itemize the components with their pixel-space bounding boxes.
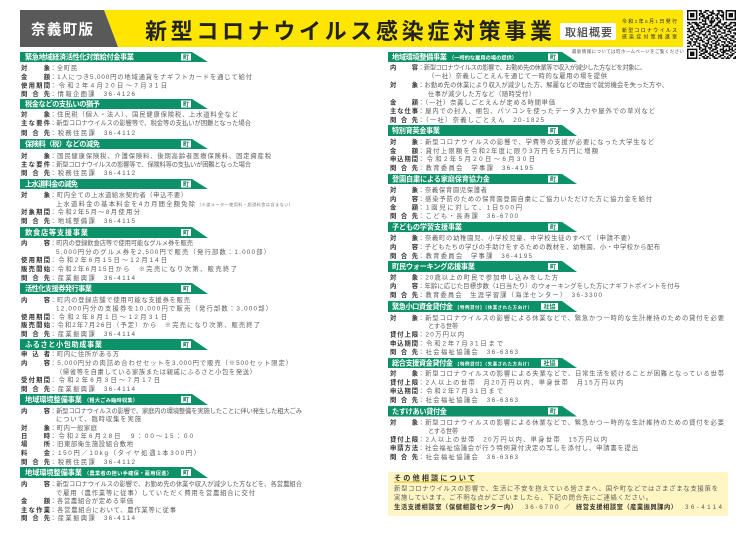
- details: ：令和2年6月15日から ※完売になり次第、販売終了: [50, 264, 237, 273]
- details: [21, 190, 293, 225]
- heading: 地域環境整備事業: [25, 468, 82, 477]
- details: ：（一社）奈義しごとえんが定める時間単価: [418, 98, 555, 106]
- details: 問合先: [390, 395, 419, 404]
- details: 問合先: [21, 513, 51, 522]
- summary label: 取組概要: [565, 25, 612, 39]
- details: ：新型コロナウイルスの影響で、お勤め先の休業や収入が減少した方などを、各営農組合: [50, 479, 303, 488]
- heading: 町: [183, 101, 189, 108]
- details: ：令和2年7月31日まで: [418, 338, 503, 348]
- details: ：町内に住所がある方: [50, 349, 119, 358]
- details: 金 額: [21, 496, 51, 505]
- details: ：住民税（個人・法人）、国民健康保険税、上水道料金など: [50, 110, 239, 119]
- details: （一社）奈義しごとえんを通じて一時的な雇用の場を提供: [428, 71, 608, 80]
- heading: 町: [550, 128, 556, 135]
- details: [21, 238, 270, 282]
- details: （帰省等を自粛している家族または親戚にふるさと小包を発送）: [56, 367, 256, 376]
- details: 問合先: [390, 347, 419, 356]
- details: [390, 368, 724, 404]
- heading: 子どもの学習支援事業: [392, 223, 462, 232]
- panel: 活性化支援券発行事業: [20, 283, 272, 338]
- callout contacts: [394, 502, 722, 511]
- details: 対 象: [21, 110, 51, 119]
- details: 対 象: [390, 80, 419, 89]
- details: 対象期間: [21, 207, 50, 216]
- details: 使用期間: [21, 81, 50, 90]
- details: ：社会福祉協議会 36-6363: [418, 395, 518, 404]
- details: 仕事が減少した方など（随時受付）: [428, 89, 535, 98]
- details: ：令和2年6月15日～12月14日: [50, 255, 167, 264]
- details: [390, 313, 725, 356]
- details: 内 容: [390, 194, 419, 203]
- heading: 町民ウォーキング応援事業: [392, 262, 475, 271]
- details: 対 象: [21, 423, 51, 432]
- details: 問合先: [390, 115, 419, 124]
- details: [390, 137, 655, 172]
- panel: 総合支援資金貸付金: [388, 358, 724, 404]
- details: ：情報企画課 36-4126: [50, 89, 135, 98]
- details: ：お勤め先の休業により収入が減少した方、解雇などの理由で就労機会を失った方や、: [418, 80, 668, 89]
- details: ：町内全ての上水道給水契約者（申込不要）: [50, 190, 187, 199]
- heading: 町: [183, 397, 189, 404]
- details: 内 容: [21, 358, 51, 367]
- icon: QR code: [687, 10, 736, 59]
- details: とする世帯: [428, 426, 458, 435]
- details: 金 額: [390, 202, 419, 212]
- region badge: [20, 10, 118, 47]
- heading: 町: [183, 141, 189, 148]
- details: 場 所: [21, 439, 51, 448]
- details: ：貸付上限額を令和2年度に限り3万円を5万円に増額: [418, 146, 599, 155]
- heading: [20, 227, 208, 238]
- panel: 飲食店等支援事業: [20, 227, 270, 282]
- details: ：令和2年6月3日～7月17日: [50, 375, 160, 384]
- details: ：地域整備課 36-4115: [50, 216, 135, 225]
- details: [21, 295, 272, 338]
- details: ：教育委員会 学事課 36-4195: [418, 251, 532, 260]
- heading: [388, 358, 577, 368]
- heading: [20, 179, 208, 189]
- callout contacts: 経営支援相談室（産業振興課内）: [576, 502, 677, 511]
- details: ：旧東部衛生施設組合敷地: [50, 439, 134, 448]
- heading: 町: [183, 54, 189, 61]
- panel: 緊急地域経済活性化対策給付金事業: [20, 52, 252, 98]
- details: 貸付上限: [390, 378, 419, 386]
- details: 対 象: [21, 190, 51, 199]
- heading: 【特例貸付】（失業された方向け）: [455, 361, 532, 368]
- panel: 地域環境整備事業（農業者の担い手確保・雇用促進）: [20, 467, 303, 522]
- details: ：令和2年4月20日～7月31日: [50, 81, 167, 90]
- details: 問合先: [21, 273, 51, 282]
- details: 申込期間: [390, 338, 418, 348]
- details: 内 容: [21, 238, 51, 247]
- details: ：全町民: [50, 63, 78, 72]
- details: 問合先: [390, 290, 419, 299]
- heading: 緊急小口資金貸付金: [392, 302, 454, 311]
- panel: 登園自粛による家庭保育協力金: [388, 174, 652, 220]
- panel: たすけあい貸付金: [388, 406, 725, 461]
- heading: （粗大ごみ臨時収集）: [84, 396, 138, 404]
- heading: 【特例貸付】（休業された方向け）: [455, 304, 532, 311]
- details: ：令和2年6月28日 9：00～15：00: [50, 431, 193, 440]
- heading: たすけあい貸付金: [392, 407, 448, 416]
- details: 問合先: [390, 163, 419, 172]
- details: 主な仕事: [390, 106, 419, 115]
- details: ：税務住民課 36-4112: [50, 128, 135, 137]
- details: 使用期間: [21, 312, 50, 321]
- details: [21, 151, 272, 177]
- details: ：5,000円分の肉詰め合わせセットを3,000円で販売（※500セット限定）: [50, 358, 292, 367]
- details: 金 額: [390, 146, 419, 155]
- heading: [388, 301, 577, 312]
- heading: 町: [550, 224, 556, 231]
- heading: 町: [183, 286, 189, 293]
- details: ：子どもたちの学びの手助けをするための教材を、幼稚園、小・中学校から配布: [418, 242, 660, 251]
- details: ：国民健康保険税、介護保険料、後期高齢者医療保険料、固定資産税: [50, 151, 272, 160]
- details: 対 象: [390, 368, 419, 378]
- details: 内 容: [21, 479, 51, 488]
- details: ：奈義町の幼稚園児、小学校児童、中学校生徒のすべて（申請不要）: [418, 233, 634, 242]
- details: （※渡メーター使用料・超過料金は含まない）: [197, 201, 293, 208]
- heading: 町: [183, 470, 189, 477]
- details: 対 象: [390, 185, 419, 194]
- details: ：令和2年5月20日～6月30日: [418, 154, 535, 163]
- heading: 町: [183, 230, 189, 237]
- heading: 特別育英金事業: [392, 126, 440, 135]
- details: ：町内の登録店舗で使用可能な支援券を販売: [50, 295, 190, 304]
- details: ：税務住民課 36-4112: [50, 168, 135, 177]
- heading: 町: [550, 54, 556, 61]
- heading: [20, 283, 208, 294]
- callout contacts: 36-4114: [685, 504, 722, 511]
- details: 料 金: [21, 448, 51, 457]
- details: 対 象: [390, 137, 419, 146]
- panel: 町民ウォーキング応援事業: [388, 261, 680, 299]
- heading: [388, 222, 577, 232]
- details: 問合先: [21, 457, 51, 466]
- details: ：各営農組合が定める単価: [50, 496, 133, 505]
- details: 5,000円分のグルメ券を2,500円で販売（発行部数：1,000部）: [56, 247, 270, 256]
- details: ：新型コロナウイルスの影響で、学費等の支援が必要になった大学生など: [418, 137, 655, 146]
- details: 貸付上限: [390, 434, 419, 444]
- heading: [388, 174, 577, 184]
- details: ：1人につき5,000円の地域通貨をナギフトカードを通じて給付: [50, 72, 252, 81]
- details: 貸付上限: [390, 330, 419, 338]
- heading: [388, 406, 577, 416]
- details: ：社会福祉協議会 36-6363: [418, 347, 518, 356]
- panel: 上水道料金の減免: [20, 179, 293, 225]
- details: ：令和2年7月26日（予定）から ※完売になり次第、販売終了: [50, 320, 260, 329]
- callout contacts: 生活支援相談室（保健相談センター内）: [394, 502, 517, 511]
- heading: 飲食店等支援事業: [25, 228, 88, 237]
- panel: 子どもの学習支援事業: [388, 222, 660, 260]
- details: ：教育委員会 学事課 36-4195: [418, 163, 533, 172]
- details: ：社会福祉協議会 36-6363: [418, 452, 518, 461]
- details: ：（一社）奈義しごとえん 20-1825: [418, 115, 544, 124]
- heading: [20, 52, 208, 62]
- details: 主な要件: [21, 160, 51, 169]
- details: 上水道料金の基本料金を4カ月間全額免除: [56, 199, 196, 208]
- details: 販売開始: [21, 264, 51, 273]
- heading: 社協: [543, 359, 556, 367]
- heading: [20, 139, 208, 149]
- details: ：産業振興課 36-4114: [50, 513, 135, 522]
- details: ：各営農組合において、農作業等に従事: [50, 505, 177, 514]
- heading: 総合支援資金貸付金: [392, 359, 454, 368]
- details: ：2人以上の世帯 月20万円以内、単身世帯 月15万円以内: [418, 378, 623, 386]
- details: [390, 185, 652, 220]
- details: [21, 63, 252, 98]
- details: [21, 110, 252, 137]
- heading: 町: [183, 342, 189, 349]
- details: ：産業振興課 36-4114: [50, 329, 135, 338]
- title banner: [20, 10, 683, 47]
- details: [390, 272, 680, 299]
- heading: [20, 467, 208, 478]
- heading: 地域環境整備事業: [25, 395, 82, 404]
- details: ：奈義保育園児保護者: [418, 185, 487, 194]
- heading: 町: [550, 408, 556, 415]
- heading: （農業者の担い手確保・雇用促進）: [84, 469, 172, 477]
- heading: 町: [550, 264, 556, 271]
- details: 内 容: [390, 62, 419, 72]
- details: 金 額: [390, 98, 419, 106]
- panel: 税金などの支払いの猶予: [20, 99, 252, 137]
- panel: ふるさと小包助成事業: [20, 339, 292, 393]
- details: [21, 479, 303, 522]
- details: ：令和2年7月31日まで: [418, 386, 503, 395]
- details: 問合先: [390, 452, 419, 461]
- details: ：屋内での封入、梱包、パソコンを使ったデータ入力や屋外での草刈など: [418, 106, 656, 115]
- details: 申請方法: [390, 443, 419, 452]
- panel: 緊急小口資金貸付金: [388, 301, 725, 356]
- heading: ふるさと小包助成事業: [25, 340, 102, 349]
- details: 問合先: [21, 329, 51, 338]
- details: 金 額: [21, 72, 51, 81]
- heading: 緊急地域経済活性化対策給付金事業: [25, 53, 134, 62]
- details: とする世帯: [428, 321, 458, 330]
- heading: 社協: [543, 303, 556, 311]
- details: ：新型コロナウイルスの影響で、お勤め先の休業等で収入が減少した方などを対象に、: [418, 62, 646, 72]
- panel: その他相談について: [388, 472, 728, 516]
- details: 問合先: [390, 211, 419, 220]
- details: 問合先: [21, 384, 51, 393]
- details: 問合先: [390, 251, 419, 260]
- details: ：税務住民課 36-4112: [50, 457, 135, 466]
- details: で雇用（農作業等に従事）していただく費用を営農組合に交付: [56, 488, 255, 497]
- heading: [20, 394, 208, 405]
- details: ：教育委員会 生涯学習課（海洋センター） 36-3300: [418, 290, 602, 299]
- details: ：新型コロナウイルスの影響による休業などで、緊急かつ一時的な生計維持のための貸付を必要: [418, 418, 725, 426]
- callout body: 実施しています。ご不明な点がございましたら、下記の問合先にご連絡ください。: [394, 492, 652, 501]
- details: について、臨時収集を実施: [56, 414, 142, 423]
- panel: 地域環境整備事業（粗大ごみ臨時収集）: [20, 394, 302, 466]
- panel: 保険料（税）などの減免: [20, 139, 272, 177]
- details: ：産業振興課 36-4114: [50, 384, 135, 393]
- callout body: 新型コロナウイルスの影響で、生活に不安を抱えている皆さまへ、国や町などではさまざまな支援策を: [394, 483, 718, 492]
- details: 問合先: [21, 216, 51, 225]
- details: 日 時: [21, 431, 51, 440]
- details: 問合先: [21, 128, 51, 137]
- heading: 保険料（税）などの減免: [25, 140, 100, 149]
- details: 12,000円分の支援券を10,000円で販売（発行部数：3,000部）: [56, 303, 272, 312]
- details: 申込者: [21, 349, 50, 358]
- details: ：150円／10kg（タイヤ処遇1本300円）: [50, 448, 200, 457]
- details: 申込期間: [390, 154, 418, 163]
- details: [21, 349, 292, 393]
- details: 対 象: [390, 233, 419, 242]
- details: ：こども・長寿課 36-6700: [418, 211, 518, 220]
- details: ：年齢に応じた目標歩数（1日当たり）のウォーキングをした方にナギフトポイントを付与: [418, 281, 680, 290]
- details: 内 容: [21, 295, 51, 304]
- heading: [20, 99, 208, 109]
- heading: 登園自粛による家庭保育協力金: [392, 175, 491, 184]
- heading: 税金などの支払いの猶予: [25, 100, 100, 109]
- details: ：感染予防のための保育園登園自粛にご協力いただけた方に協力金を給付: [418, 194, 652, 203]
- issue info: 感染症対策推進室: [622, 34, 677, 40]
- details: ：新型コロナウイルスの影響による失業などで、日常生活を続けることが困難となっている世帯: [418, 368, 724, 378]
- title: 新型コロナウイルス感染症対策事業: [145, 19, 552, 44]
- heading: [388, 52, 577, 62]
- details: 問合先: [21, 168, 51, 177]
- details: 主な要件: [21, 118, 51, 127]
- website note: 最新情報については町ホームページをご覧ください: [572, 48, 684, 55]
- details: 主な作業: [21, 505, 51, 514]
- callout contacts: 36-6700 ／: [525, 504, 571, 511]
- details: ：産業振興課 36-4114: [50, 273, 135, 282]
- heading: 地域環境整備事業: [392, 53, 447, 62]
- details: ：20万円以内: [418, 330, 464, 338]
- callout heading: その他相談について: [394, 474, 475, 482]
- details: ：新型コロナウイルスの影響等で、保険料等の支払いが困難となった場合: [50, 160, 252, 169]
- details: ：令和2年8月1日～12月31日: [50, 312, 167, 321]
- details: 内 容: [390, 281, 419, 290]
- heading: 上水道料金の減免: [25, 180, 78, 189]
- details: ：新型コロナウイルスの影響等で、税金等の支払いが困難となった場合: [50, 118, 252, 127]
- details: 問合先: [21, 89, 51, 98]
- details: 受付期間: [21, 375, 50, 384]
- issue info: 新型コロナウイルス: [622, 27, 677, 34]
- details: ：町内一般家庭: [50, 423, 98, 432]
- details: ：町内の登録飲食店等で使用可能なグルメ券を販売: [50, 238, 193, 247]
- callout body: [394, 483, 718, 501]
- details: 販売開始: [21, 320, 51, 329]
- details: [390, 233, 660, 260]
- details: 対 象: [390, 418, 419, 426]
- details: 内 容: [21, 406, 51, 415]
- region badge: 奈義町版: [31, 22, 94, 38]
- details: 内 容: [390, 242, 419, 251]
- details: [390, 62, 668, 124]
- details: 使用期間: [21, 255, 50, 264]
- issue info: 令和2年6月1日発行: [622, 18, 677, 25]
- heading: [20, 339, 208, 350]
- issue info: [622, 18, 677, 40]
- details: 対 象: [21, 63, 51, 72]
- heading: 町: [183, 181, 189, 188]
- panel: 地域環境整備事業（一時的な雇用の場の提供）: [388, 52, 668, 124]
- panel: 特別育英金事業: [388, 125, 655, 172]
- heading: （一時的な雇用の場の提供）: [449, 54, 517, 62]
- details: ：新型コロナウイルスの影響による休業などで、緊急かつ一時的な生計維持のための貸付を必要: [418, 313, 725, 322]
- details: ：2人以上の世帯 20万円以内、単身世帯 15万円以内: [418, 434, 607, 444]
- details: ：1園児に対して、1日500円: [418, 202, 522, 212]
- details: ：令和2年5月～8月使用分: [50, 207, 141, 216]
- details: ：新型コロナウイルスの影響で、家庭内の環境整備を実施したことに伴い発生した粗大ごみ: [50, 406, 302, 415]
- details: 対 象: [390, 272, 419, 282]
- heading: [388, 261, 577, 272]
- heading: [388, 125, 577, 136]
- details: 対 象: [390, 313, 419, 322]
- heading: 活性化支援券発行事業: [25, 284, 92, 293]
- details: [390, 418, 725, 461]
- heading: 町: [550, 176, 556, 183]
- details: 対 象: [21, 151, 51, 160]
- details: 申込期間: [390, 386, 418, 395]
- summary label: [560, 23, 616, 40]
- details: [21, 406, 302, 466]
- details: ：20歳以上の町民で参加申し込みをした方: [418, 272, 558, 282]
- details: ：社会福祉協議会が行う特例貸付決定の写しを添付し、申請書を提出: [418, 443, 638, 452]
